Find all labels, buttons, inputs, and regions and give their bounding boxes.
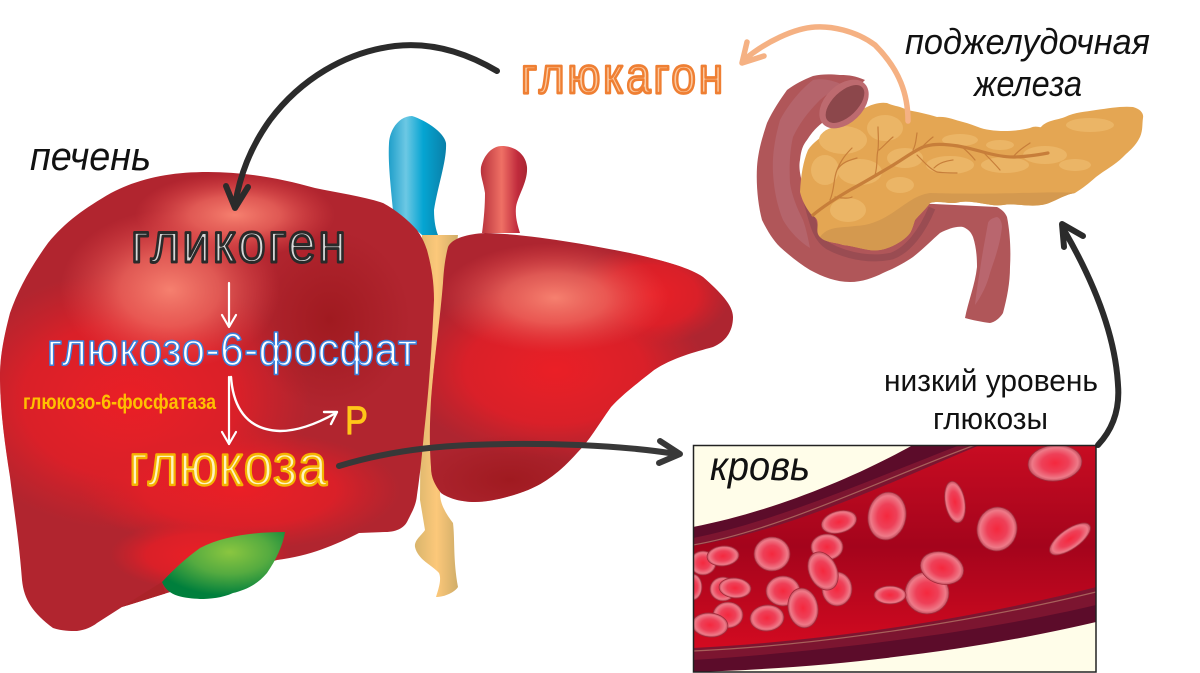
duodenum: [757, 74, 1010, 323]
label: low glucose: низкий уровень: [884, 365, 1098, 398]
label: glucagon: глюкагон: [521, 48, 723, 105]
label: pancreas line 2: железа: [972, 64, 1082, 105]
right lobe of liver: [430, 233, 733, 502]
icon: liver: [0, 116, 740, 635]
bile duct: [415, 235, 458, 597]
pancreas lobules: [811, 115, 1114, 222]
text: glucose-6-phosphatase: глюкозо-6-фосфатаза: [23, 391, 217, 414]
gallbladder: [162, 532, 285, 599]
red vessel: [481, 146, 527, 233]
duodenum leg highlight: [975, 217, 1002, 305]
arrow: glucose to blood: [339, 441, 680, 466]
label: low glucose line 2: глюкозы: [933, 403, 1048, 436]
text: glucose-6-phosphate: глюкозо-6-фосфат: [47, 325, 417, 375]
arrow: blood to pancreas: [1062, 224, 1118, 445]
text: glucose: глюкоза: [129, 434, 328, 498]
vessel: [693, 445, 1096, 672]
blood frame: [694, 446, 1096, 672]
duodenum opening: [810, 70, 878, 138]
label: blood: кровь: [710, 443, 810, 489]
blue vessel: [389, 116, 446, 235]
left lobe of liver: [0, 165, 440, 635]
arrow: g6p to glucose: [222, 377, 236, 444]
duodenum highlight: [773, 79, 843, 248]
label: pancreas: поджелудочная: [905, 22, 1150, 63]
arrow: glucagon to liver: [226, 45, 497, 208]
arrow: glycogen to g6p: [222, 283, 236, 327]
red blood cells: [684, 443, 1095, 639]
label: liver: печень: [30, 134, 151, 179]
arrow: pancreas to glucagon: [742, 27, 908, 121]
arrow: phosphate release: [231, 377, 337, 431]
icon: pancreas: [757, 70, 1143, 323]
text: glycogen: гликоген: [131, 212, 346, 275]
panel: blood vessel: [684, 443, 1096, 672]
pancreatic ducts: [813, 127, 1048, 215]
pancreas lower shading: [820, 192, 1075, 250]
shadow under pancreas: [803, 190, 932, 258]
pancreas body: [800, 103, 1143, 250]
text: P: Р: [345, 399, 368, 443]
